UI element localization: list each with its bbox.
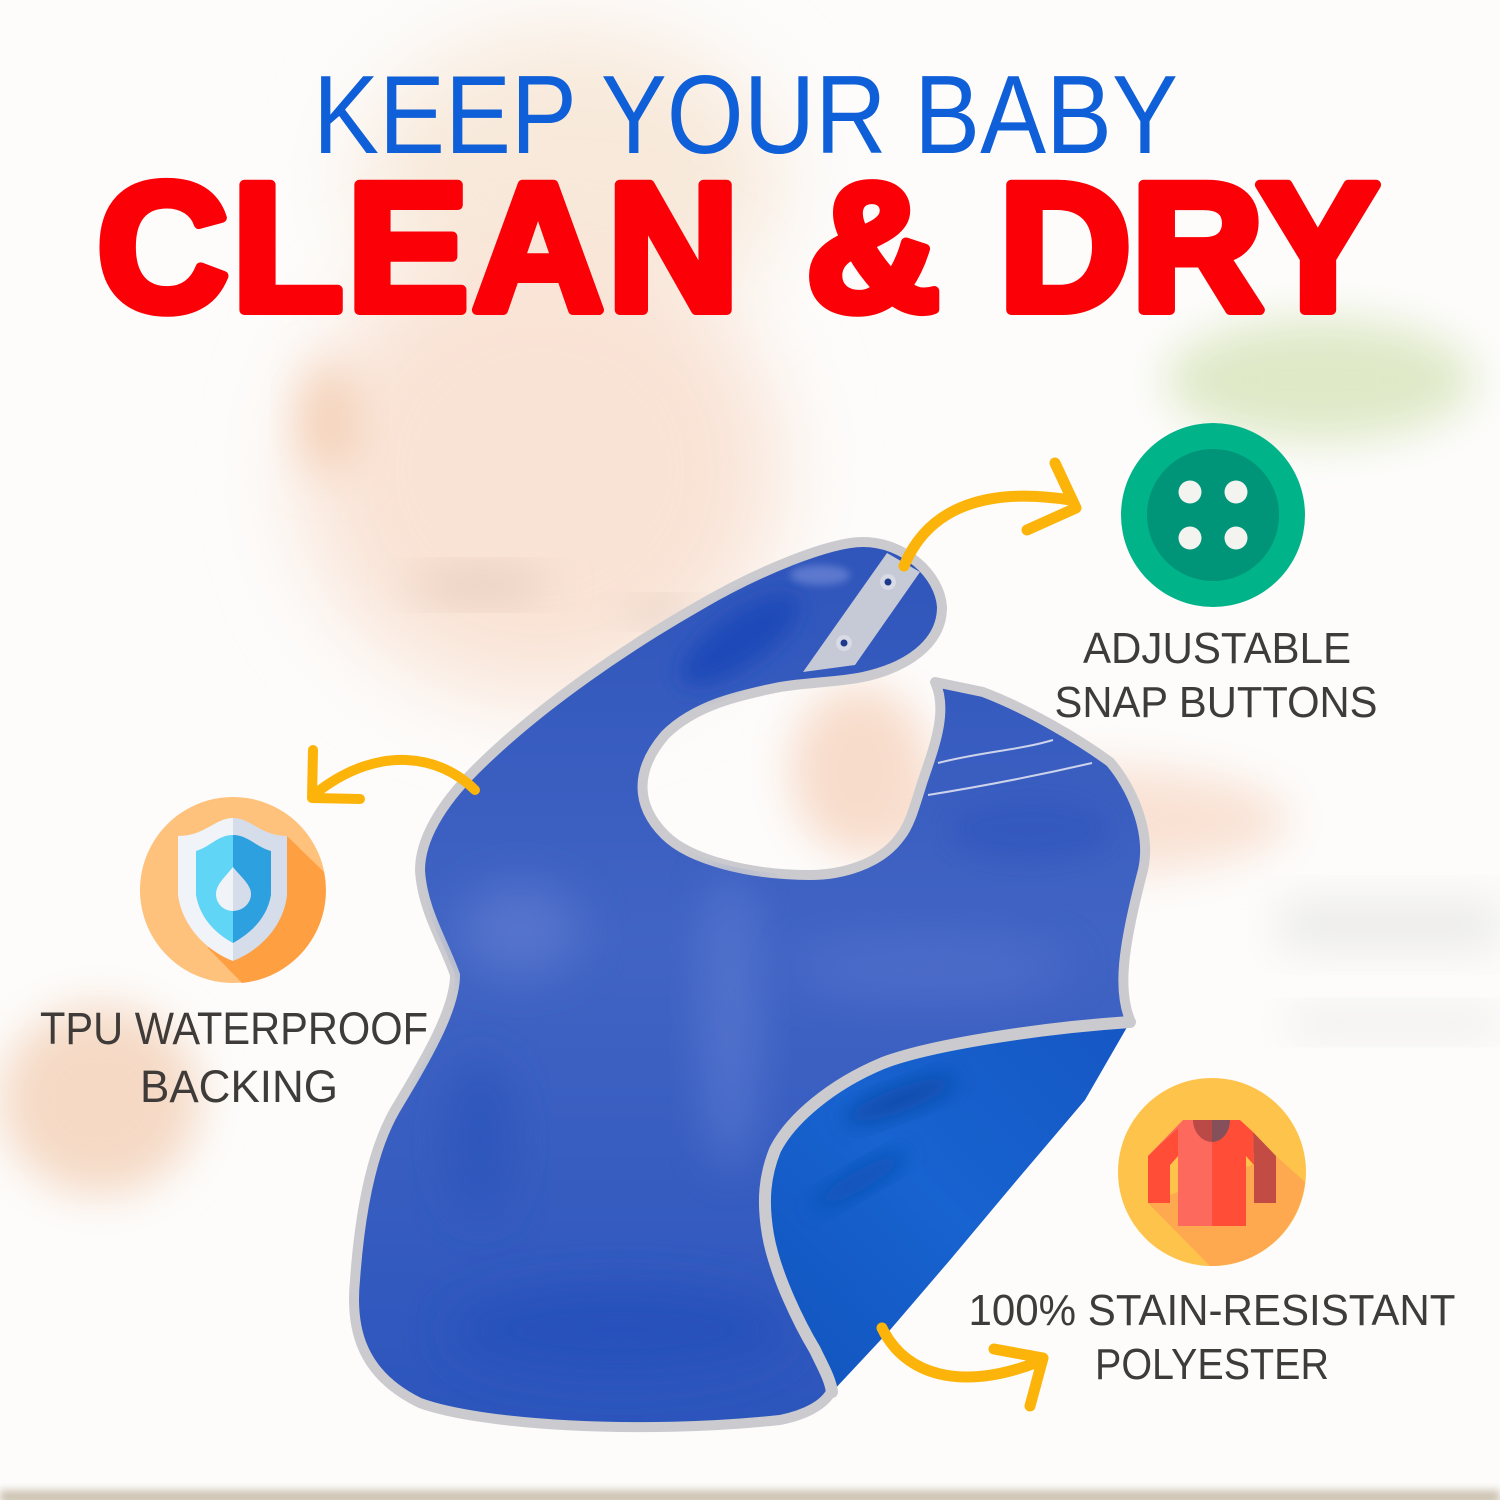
heading: clean and dry: & (806, 145, 940, 349)
label: stain-resistant polyester: POLYESTER (1095, 1340, 1329, 1389)
product: blue bib (354, 542, 1145, 1427)
arrow: to snap buttons (904, 463, 1076, 566)
label: adjustable snap buttons: SNAP BUTTONS (1054, 678, 1378, 727)
label: adjustable snap buttons: ADJUSTABLE (1083, 624, 1351, 673)
label: tpu waterproof backing: BACKING (140, 1061, 338, 1112)
label: stain-resistant polyester: 100% STAIN-RESISTANT (968, 1286, 1456, 1335)
icon: button (1121, 423, 1305, 607)
heading: keep your baby: KEEP YOUR BABY (313, 53, 1178, 177)
heading: clean and dry (97, 145, 1379, 349)
stitching (928, 740, 1092, 795)
icon: shirt (1118, 1078, 1306, 1266)
label: adjustable snap buttons (1054, 624, 1378, 727)
label: stain-resistant polyester (968, 1286, 1456, 1389)
snap strap (803, 553, 920, 672)
arrow: to polyester (882, 1328, 1043, 1406)
label: tpu waterproof backing: TPU WATERPROOF (40, 1003, 428, 1054)
title (97, 53, 1379, 349)
label: tpu waterproof backing (40, 1003, 428, 1112)
heading: clean and dry: CLEAN (97, 145, 739, 349)
heading: clean and dry: DRY (999, 145, 1379, 349)
folded corner (765, 1022, 1130, 1392)
icon: shield (140, 797, 326, 983)
arrow: to waterproof backing (312, 750, 475, 799)
